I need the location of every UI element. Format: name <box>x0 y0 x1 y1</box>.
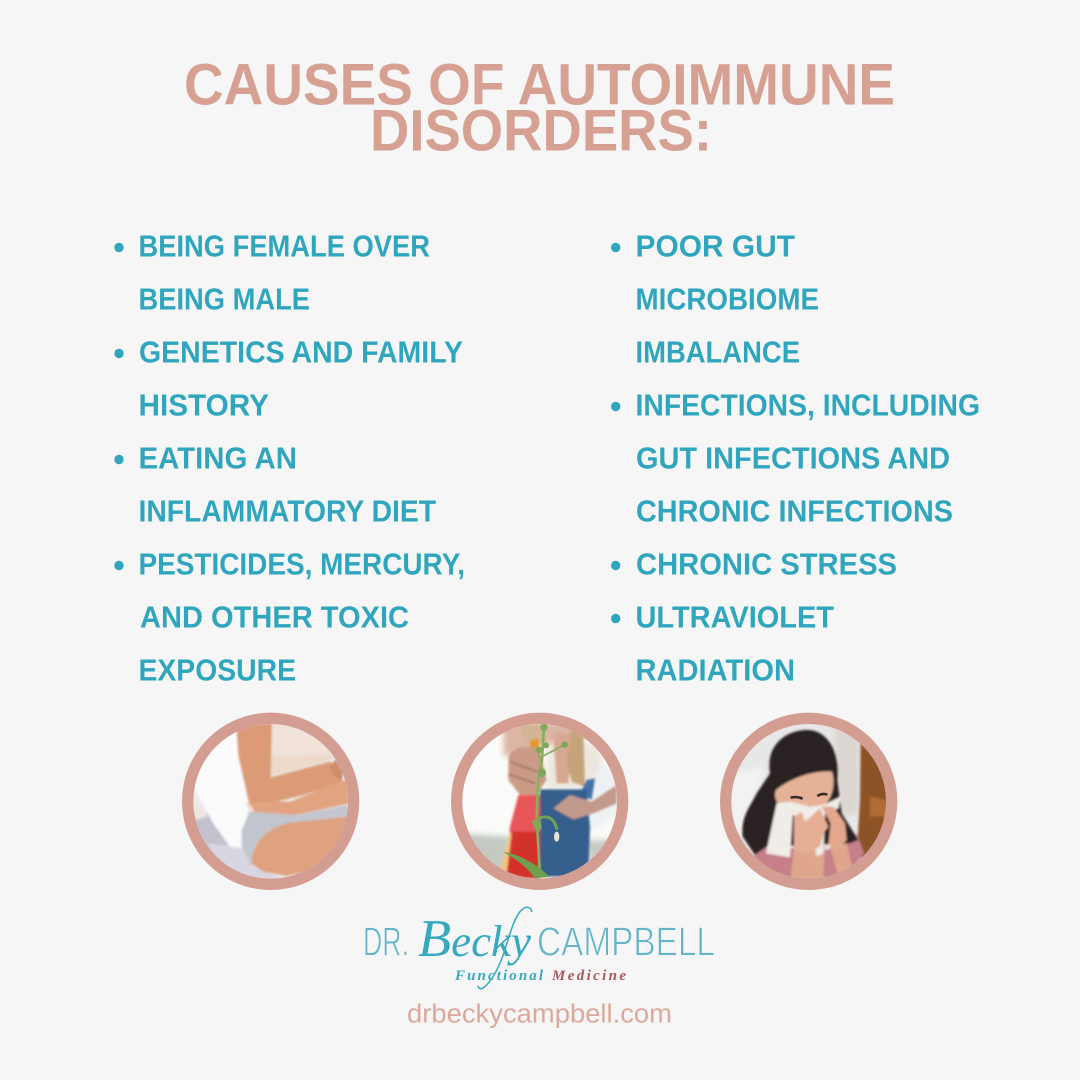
left column list <box>114 228 465 687</box>
list item: chronic stress: CHRONIC STRESS <box>636 546 897 581</box>
logo: Dr. Becky Campbell Functional Medicine: Functional <box>454 968 544 984</box>
list item: toxic exposure: EXPOSURE <box>138 652 296 687</box>
right column list <box>611 228 980 687</box>
list item: ultraviolet radiation: RADIATION <box>636 652 795 687</box>
list item: infections <box>611 387 980 528</box>
photo: girl blowing nose into tissue <box>720 713 897 890</box>
logo: Dr. Becky Campbell Functional Medicine: Medicine <box>551 968 626 984</box>
list item: infections: GUT INFECTIONS AND <box>636 440 950 475</box>
list item: ultraviolet radiation: ULTRAVIOLET <box>636 599 834 634</box>
list item: ultraviolet radiation <box>611 599 834 687</box>
list item: toxic exposure: AND OTHER TOXIC <box>140 599 409 634</box>
list item: inflammatory diet <box>114 440 436 528</box>
list item: being female <box>114 228 430 316</box>
list item: gut microbiome: POOR GUT <box>636 228 795 263</box>
logo: Dr. Becky Campbell Functional Medicine: Becky <box>418 910 531 968</box>
title: DISORDERS: <box>370 98 712 164</box>
list item: genetics: GENETICS AND FAMILY <box>139 334 463 369</box>
list item: inflammatory diet: INFLAMMATORY DIET <box>138 493 436 528</box>
list item: infections: CHRONIC INFECTIONS <box>636 493 953 528</box>
logo: Dr. Becky Campbell Functional Medicine: DR. <box>363 919 409 965</box>
list item: genetics <box>114 334 463 422</box>
title <box>184 52 895 164</box>
website url: drbeckycampbell.com <box>407 1001 672 1029</box>
list item: toxic exposure <box>114 546 465 687</box>
title: CAUSES OF AUTOIMMUNE <box>184 52 895 118</box>
list item: gut microbiome: MICROBIOME <box>636 281 819 316</box>
list item: being female: BEING FEMALE OVER <box>138 228 430 263</box>
list item: gut microbiome: IMBALANCE <box>636 334 800 369</box>
list item: infections: INFECTIONS, INCLUDING <box>636 387 980 422</box>
list item: being female: BEING MALE <box>138 281 310 316</box>
list item: inflammatory diet: EATING AN <box>138 440 297 475</box>
logo: Dr. Becky Campbell Functional Medicine: CAMPBELL <box>537 919 715 965</box>
infographic canvas <box>114 64 978 1028</box>
photo: woman holding stomach <box>182 713 359 890</box>
photo: woman spraying weed with pesticide <box>451 713 628 890</box>
list item: genetics: HISTORY <box>138 387 269 422</box>
list item: gut microbiome <box>611 228 819 369</box>
logo: Dr. Becky Campbell Functional Medicine <box>363 907 715 989</box>
list item: toxic exposure: PESTICIDES, MERCURY, <box>138 546 465 581</box>
